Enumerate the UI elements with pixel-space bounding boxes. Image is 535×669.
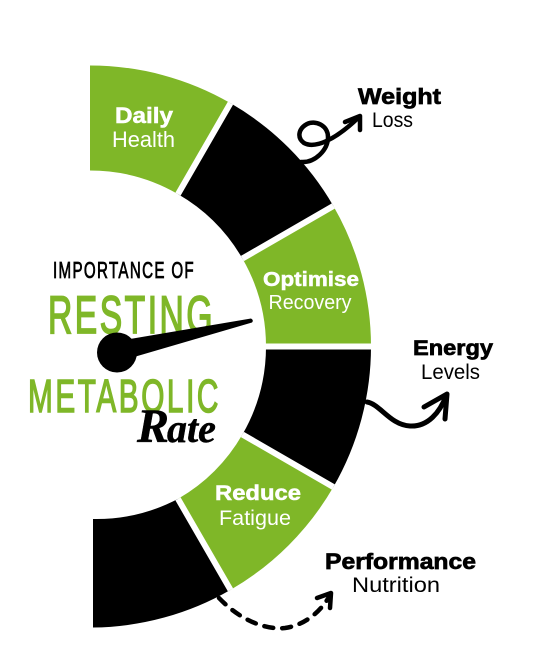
- label: optimise recovery: Recovery: [268, 292, 352, 314]
- segment: daily health: [90, 66, 230, 194]
- title line: metabolic: METABOLIC: [28, 370, 221, 422]
- label: energy levels: Levels: [421, 361, 480, 384]
- arrow: weight loss: [299, 116, 360, 162]
- label: performance nutrition: Performance: [325, 549, 476, 574]
- gauge: [90, 66, 375, 628]
- segment: reduce fatigue: [178, 434, 333, 590]
- label: energy levels: Energy: [413, 337, 493, 360]
- label: daily health: Daily: [115, 103, 174, 128]
- title: [28, 257, 221, 453]
- arrow: performance nutrition: [219, 593, 331, 628]
- label: weight loss: Weight: [358, 84, 442, 109]
- label: weight loss: [358, 84, 442, 132]
- segment: weight loss: [178, 103, 333, 259]
- label: performance nutrition: [325, 549, 476, 597]
- label: daily health: Health: [112, 127, 175, 152]
- label: energy levels: [413, 337, 493, 384]
- segment: performance nutrition: [93, 499, 230, 628]
- label: performance nutrition: Nutrition: [352, 574, 440, 597]
- label: reduce fatigue: [215, 482, 301, 530]
- gauge needle: [97, 318, 253, 372]
- label: optimise recovery: Optimise: [263, 269, 359, 291]
- label: reduce fatigue: Fatigue: [219, 507, 291, 530]
- label: daily health: [112, 103, 175, 152]
- segment: energy levels: [242, 346, 371, 487]
- title line: resting: RESTING: [48, 286, 215, 345]
- segment: optimise recovery: [242, 206, 371, 346]
- arrow: energy levels: [367, 394, 447, 426]
- label: optimise recovery: [263, 269, 359, 314]
- label: weight loss: Loss: [372, 109, 413, 132]
- label: reduce fatigue: Reduce: [215, 482, 301, 505]
- title line: importance of: IMPORTANCE OF: [53, 257, 195, 283]
- title line: rate: Rate: [136, 400, 216, 453]
